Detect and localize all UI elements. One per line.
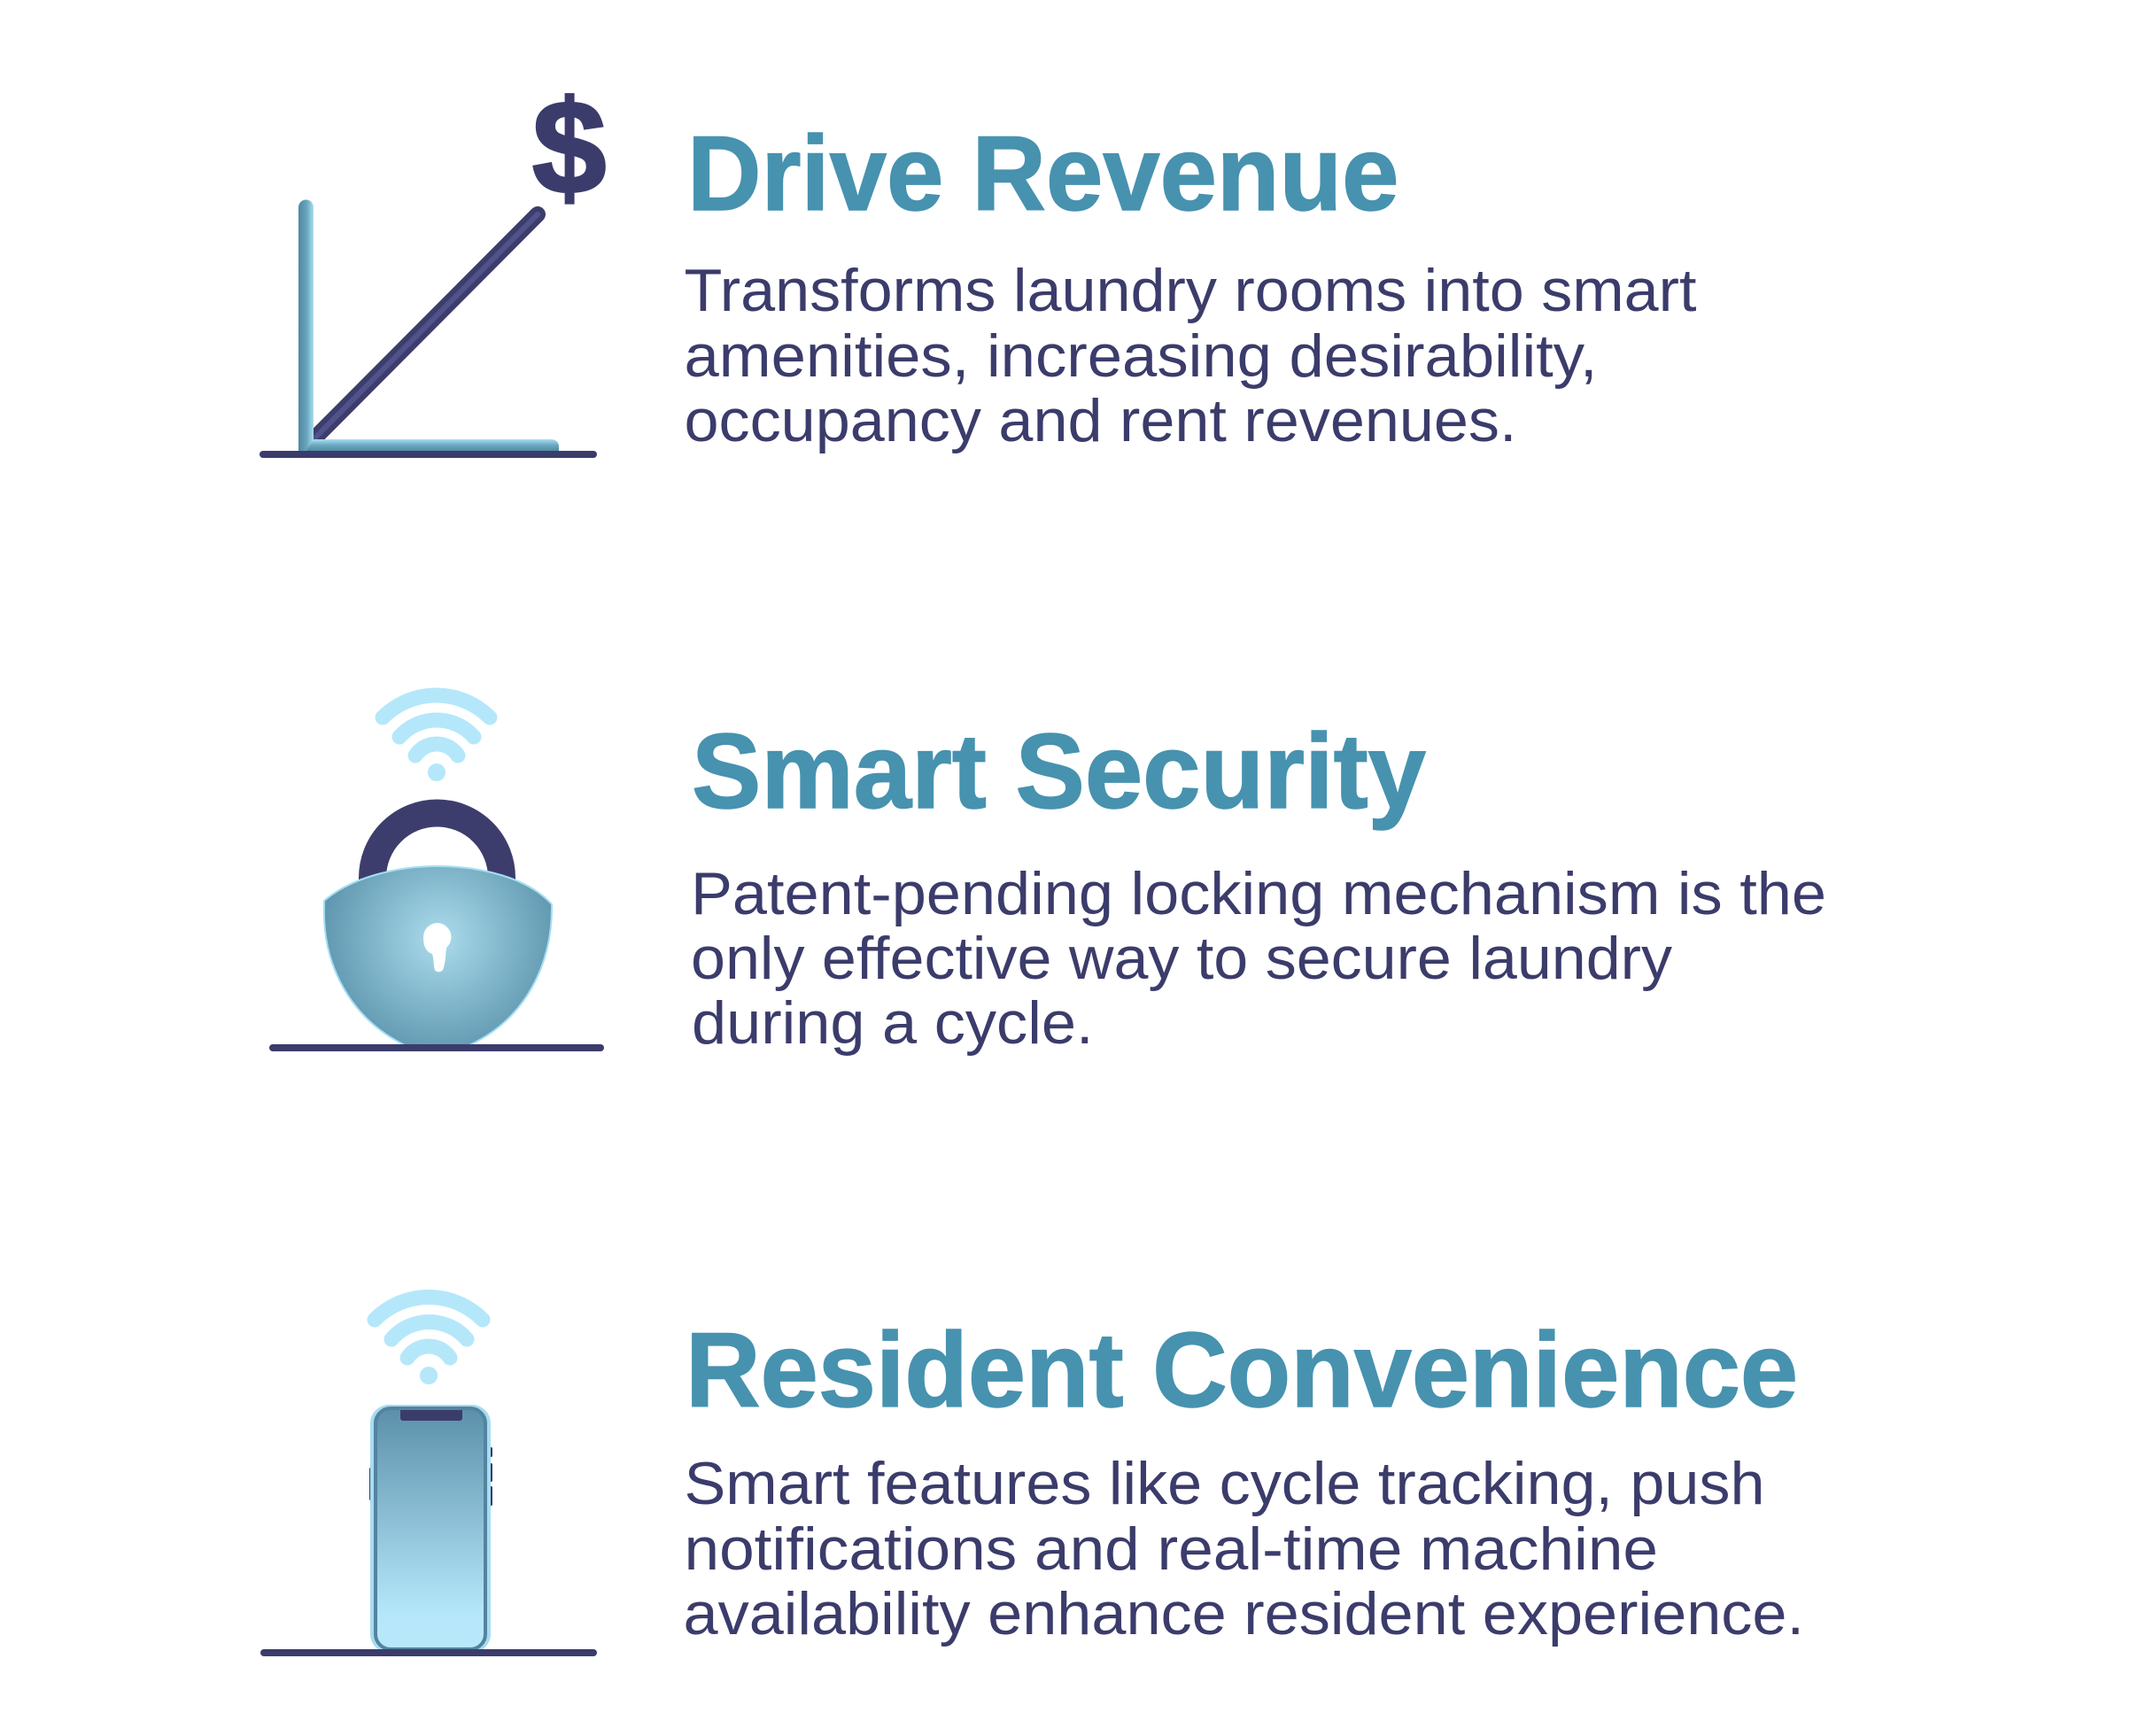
description: Smart Security: Patent-pending locking mechanism is the (691, 860, 1826, 927)
description: Resident Convenience: notifications and real-time machine (684, 1515, 1658, 1583)
panel: Resident Convenience (264, 1297, 1804, 1653)
description: Resident Convenience: availability enhance resident experience. (684, 1580, 1804, 1647)
icon: smartphone with wifi (264, 1297, 593, 1653)
wifi signal (375, 1297, 483, 1384)
panel: Drive Revenue (263, 73, 1697, 454)
phone side buttons (369, 1447, 492, 1506)
padlock body (324, 866, 552, 1045)
chart vertical axis (298, 200, 314, 452)
heading: Smart Security: Smart Security (692, 712, 1426, 831)
padlock shackle (372, 813, 501, 886)
phone frame (370, 1405, 491, 1653)
description: Smart Security: only effective way to secure laundry (691, 925, 1672, 992)
chart horizontal axis (298, 439, 559, 452)
icon: wifi padlock (273, 695, 600, 1048)
keyhole (423, 923, 451, 972)
ground line (273, 1044, 600, 1051)
description: Smart Security (691, 860, 1826, 1057)
heading: Resident Convenience: Resident Convenience (686, 1311, 1798, 1430)
heading: Drive Revenue: Drive Revenue (687, 114, 1399, 233)
phone notch (400, 1410, 462, 1421)
description: Resident Convenience: Smart features like cycle tracking, push (684, 1450, 1764, 1517)
ground line (263, 451, 593, 458)
rising trend line (301, 214, 538, 452)
dollar sign: $ (532, 73, 606, 221)
description: Drive Revenue: occupancy and rent revenues. (684, 387, 1516, 454)
icon: rising revenue chart with dollar sign (263, 73, 606, 454)
description: Smart Security: during a cycle. (692, 989, 1093, 1057)
description: Drive Revenue: Transforms laundry rooms into smart (684, 257, 1697, 324)
description: Resident Convenience (684, 1450, 1804, 1647)
description: Drive Revenue: amenities, increasing desirability, (684, 322, 1598, 390)
description: Drive Revenue (684, 257, 1697, 454)
phone screen (376, 1408, 485, 1649)
ground line (264, 1649, 593, 1656)
panel: Smart Security (273, 695, 1826, 1057)
wifi signal (383, 695, 490, 781)
